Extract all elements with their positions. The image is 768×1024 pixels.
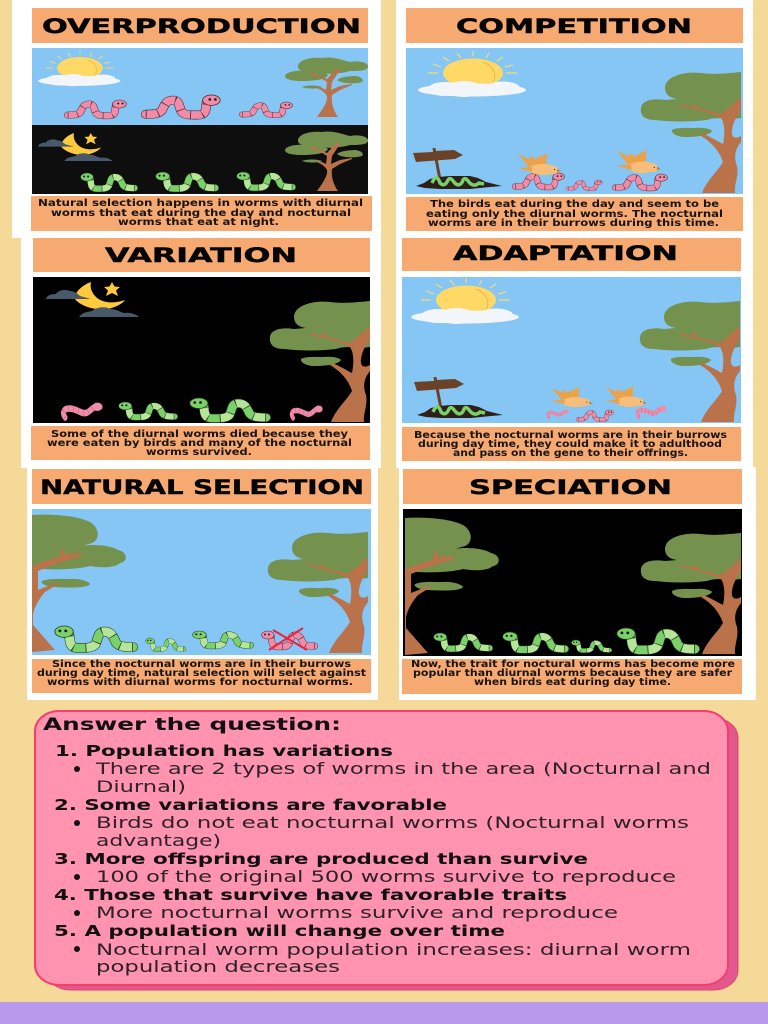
answer list: 100 of the original 500 worms survive to reproduce [96, 867, 676, 886]
caption: competition: The birds eat during the day and seem to be [430, 199, 719, 210]
answer list: Nocturnal worm population increases: diurnal worm [96, 940, 691, 959]
heading: competition: COMPETITION [456, 15, 692, 38]
panel: competition [396, 0, 753, 238]
heading: speciation: SPECIATION [469, 476, 672, 499]
answer list: 3. More offspring are produced than survive [54, 850, 588, 868]
caption: adaptation [402, 427, 741, 461]
illustration: worms by day and night [32, 48, 368, 194]
panel: adaptation [396, 238, 753, 468]
illustration: nocturnal worms dominate [403, 509, 742, 656]
heading: variation [33, 238, 370, 272]
caption: speciation [402, 659, 742, 694]
heading: adaptation [402, 238, 741, 271]
caption: natural selection [32, 659, 371, 693]
caption: natural selection: Since the nocturnal worms are in their burrows [52, 659, 351, 670]
caption: competition: eating only the diurnal worms. The nocturnal [426, 209, 723, 220]
panel: speciation [399, 467, 756, 700]
answer list: More nocturnal worms survive and reproduce [96, 903, 618, 922]
heading: speciation [403, 469, 742, 504]
caption: natural selection: during day time, natural selection will select against [37, 668, 366, 679]
bottom purple band [0, 1002, 768, 1024]
heading: natural selection [32, 469, 371, 504]
heading: competition [406, 8, 743, 43]
illustration: survivors at night [33, 277, 370, 423]
illustration: nocturnal worms safe in burrow [402, 277, 741, 423]
panel: natural selection [27, 467, 378, 700]
caption: speciation: when birds eat during day time. [474, 677, 671, 688]
caption: variation: Some of the diurnal worms died because they [51, 429, 349, 440]
caption: competition [406, 197, 743, 231]
heading: natural selection: NATURAL SELECTION [40, 476, 364, 499]
answer list: 1. Population has variations [55, 742, 393, 760]
caption: natural selection: worms with diurnal worms for nocturnal worms. [47, 677, 353, 688]
panel: variation [21, 238, 381, 468]
illustration: birds eating diurnal worms [406, 48, 743, 194]
answer list: Birds do not eat nocturnal worms (Nocturnal worms [96, 813, 689, 832]
answer list: 2. Some variations are favorable [54, 796, 447, 814]
answer list: 5. A population will change over time [54, 922, 505, 940]
panel: answer the question [35, 711, 738, 990]
caption: variation: worms survived. [146, 447, 252, 458]
heading: overproduction [32, 8, 368, 43]
caption: variation: were eaten by birds and many of the nocturnal [47, 438, 352, 449]
heading: adaptation: ADAPTATION [453, 242, 678, 265]
answer list: Diurnal) [96, 777, 186, 796]
caption: adaptation: and pass on the gene to their offrings. [453, 448, 688, 459]
answer list: advantage) [96, 831, 221, 850]
illustration: selection against diurnal worms [32, 509, 371, 655]
heading: variation: VARIATION [105, 244, 297, 267]
answer list: population decreases [96, 957, 340, 976]
caption: overproduction: Natural selection happens in worms with diurnal [38, 198, 363, 209]
caption: adaptation: during day time, they could make it to adulthood [418, 439, 722, 450]
caption: competition: worms are in their burrows during this time. [428, 218, 719, 229]
panel: overproduction [12, 0, 381, 238]
heading: overproduction: OVERPRODUCTION [42, 15, 361, 38]
caption: overproduction: worms that eat during the day and nocturnal [51, 208, 351, 219]
answer list: There are 2 types of worms in the area (Nocturnal and [95, 759, 711, 778]
caption: speciation: popular than diurnal worms because they are safer [413, 668, 732, 679]
caption: overproduction [31, 196, 372, 231]
caption: speciation: Now, the trait for noctural worms has become more [411, 659, 735, 670]
caption: adaptation: Because the nocturnal worms are in their burrows [414, 430, 727, 441]
answer list [54, 742, 711, 976]
caption: variation [31, 426, 370, 460]
heading: answer the question: Answer the question: [43, 715, 341, 735]
caption: overproduction: worms that eat at night. [118, 217, 279, 228]
answer list: 4. Those that survive have favorable traits [54, 886, 567, 904]
